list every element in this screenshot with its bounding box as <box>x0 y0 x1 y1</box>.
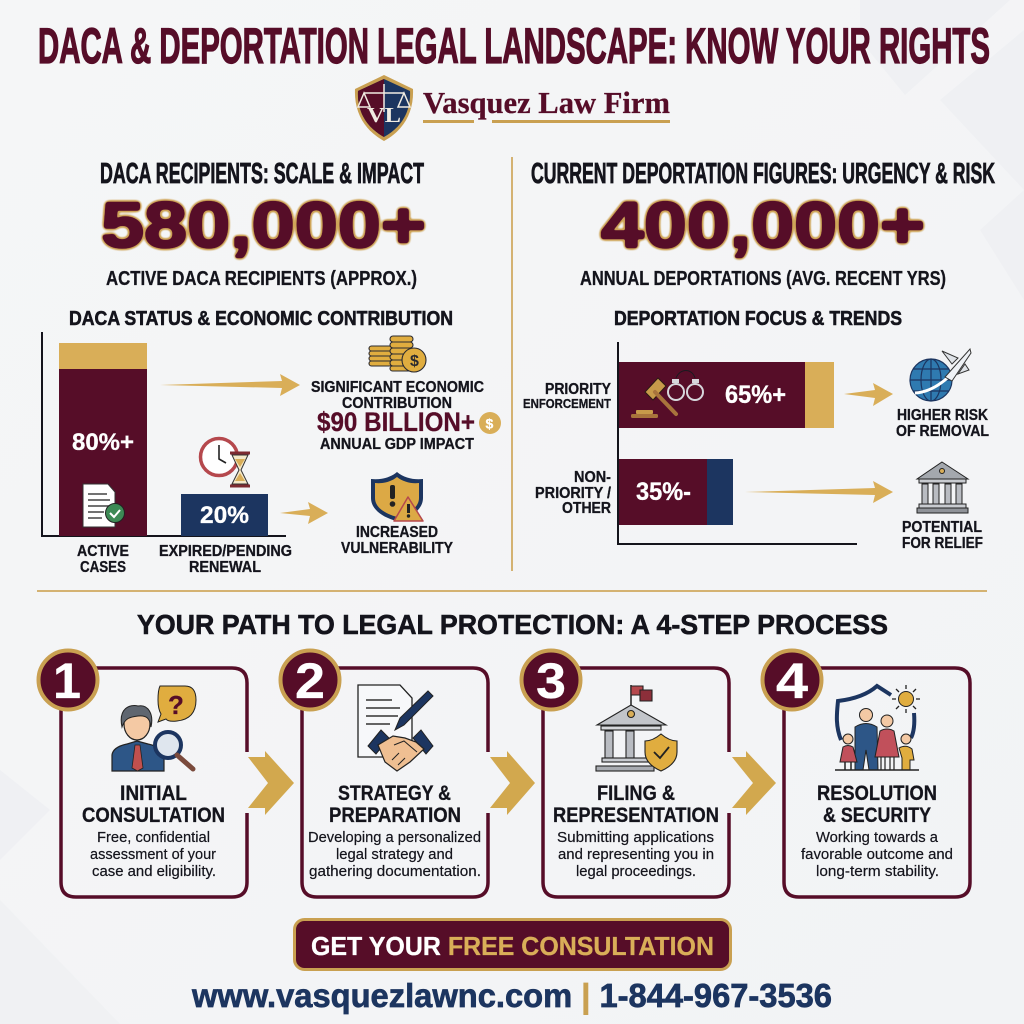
step description <box>557 829 714 880</box>
callout: higher risk of removal: OF REMOVAL <box>896 423 989 440</box>
step title: RESOLUTION <box>817 782 937 805</box>
panel: step 4 <box>762 650 970 897</box>
value 20%: 20% <box>200 502 249 529</box>
step title <box>329 782 461 827</box>
step description: long-term stability. <box>816 863 939 880</box>
label: expired/pending renewal <box>159 543 292 576</box>
icon: courthouse <box>917 462 968 513</box>
number badge 2 <box>280 650 340 710</box>
arrow: step 3 to 4 <box>732 751 776 815</box>
callout: economic contribution: SIGNIFICANT ECONOMIC <box>311 379 484 396</box>
big number: 400,000+ <box>601 189 925 261</box>
icon: handcuffs <box>668 370 703 400</box>
icon: courthouse with shield <box>596 685 677 771</box>
value 80%: 80%+ <box>72 429 134 456</box>
label: active cases: ACTIVE <box>77 543 129 560</box>
label: non-priority / other <box>535 469 612 517</box>
callout: economic contribution <box>311 379 484 453</box>
section divider horizontal <box>37 590 987 592</box>
step description: legal strategy and <box>336 846 453 863</box>
card outline <box>543 668 729 897</box>
coin symbol: $ <box>410 353 419 370</box>
label: priority enforcement: PRIORITY <box>545 381 612 398</box>
value 35%: 35%- <box>636 478 691 506</box>
card outline <box>302 668 488 897</box>
logo wordmark: Vasquez Law Firm <box>423 85 670 120</box>
label: priority enforcement: ENFORCEMENT <box>523 397 611 411</box>
callout: higher risk of removal: HIGHER RISK <box>897 407 989 424</box>
value 65%: 65%+ <box>725 381 786 409</box>
heading: DACA RECIPIENTS: SCALE & IMPACT <box>100 158 424 190</box>
bar chart: deportation focus <box>523 342 857 544</box>
icon: person with magnifier: ? <box>168 690 184 720</box>
step description <box>308 829 481 880</box>
step title <box>553 782 719 827</box>
step description: case and eligibility. <box>92 863 216 880</box>
arrow: step 2 to 3 <box>490 751 535 815</box>
heading: 4-step process: YOUR PATH TO LEGAL PROTECTION: A 4-STEP PROCESS <box>137 609 888 640</box>
step title: INITIAL <box>120 782 187 805</box>
arrow: to potential relief <box>745 481 893 503</box>
step title: PREPARATION <box>329 804 461 827</box>
label: priority enforcement <box>523 381 612 411</box>
big number: 580,000+ <box>101 189 426 261</box>
number badge 4 <box>762 650 822 710</box>
callout: economic contribution: ANNUAL GDP IMPACT <box>320 436 474 453</box>
card outline <box>61 668 247 897</box>
icon: shield crest <box>355 75 413 141</box>
number badge 4: 4 <box>776 653 808 709</box>
number badge 1: 1 <box>53 653 81 709</box>
step title: CONSULTATION <box>82 804 225 827</box>
step description: Submitting applications <box>557 829 714 846</box>
icon: shield crest: VL <box>367 103 401 127</box>
footer contact line: www.vasquezlawnc.com | 1-844-967-3536 <box>191 977 832 1014</box>
step description <box>801 829 953 880</box>
callout: potential for relief: POTENTIAL <box>902 519 982 536</box>
panel: step 1 <box>38 650 247 897</box>
label: non-priority / other: OTHER <box>562 500 611 517</box>
callout: economic contribution: $90 BILLION+ <box>317 407 475 437</box>
call-to-action button <box>294 920 730 970</box>
icon: coins <box>369 336 426 372</box>
arrow: to economic contribution <box>160 374 300 396</box>
number badge 1 <box>38 650 98 710</box>
icon: clock and hourglass <box>200 438 250 486</box>
step title: FILING & <box>597 782 675 805</box>
subheading: ACTIVE DACA RECIPIENTS (APPROX.) <box>106 268 417 290</box>
label: expired/pending renewal: EXPIRED/PENDING <box>159 543 292 560</box>
arrow: to increased vulnerability <box>280 502 328 524</box>
step title: & SECURITY <box>823 804 931 827</box>
number badge 2: 2 <box>295 653 325 709</box>
step description: gathering documentation. <box>309 863 481 880</box>
section divider vertical <box>511 157 513 571</box>
label: non-priority / other: PRIORITY / <box>535 485 612 502</box>
callout: increased vulnerability: VULNERABILITY <box>341 540 454 557</box>
callout: economic contribution: CONTRIBUTION <box>342 395 452 412</box>
callout: increased vulnerability <box>341 524 454 557</box>
label: active cases <box>77 543 129 576</box>
icon: person with magnifier <box>112 686 196 771</box>
step description: favorable outcome and <box>801 846 953 863</box>
callout: higher risk of removal <box>896 407 989 440</box>
icon: gavel <box>631 378 676 418</box>
step description: Free, confidential <box>97 829 210 846</box>
chart heading: DEPORTATION FOCUS & TRENDS <box>614 307 902 330</box>
step title: REPRESENTATION <box>553 804 719 827</box>
icon: dollar coin: $ <box>486 416 494 432</box>
step description: Working towards a <box>816 829 939 846</box>
icon: warning shield <box>371 472 423 521</box>
arrow: step 1 to 2 <box>248 751 294 815</box>
panel: step 2 <box>280 650 488 897</box>
card outline <box>784 668 970 897</box>
icon: globe and plane <box>910 349 971 401</box>
callout: potential for relief <box>902 519 983 552</box>
panel: step 3 <box>522 650 729 897</box>
icon: document with check <box>83 484 124 527</box>
number badge 3: 3 <box>536 653 566 709</box>
number badge 3 <box>522 650 580 710</box>
subheading: ANNUAL DEPORTATIONS (AVG. RECENT YRS) <box>580 268 946 290</box>
icon: dollar coin <box>479 412 501 434</box>
step title: STRATEGY & <box>338 782 451 805</box>
step description: assessment of your <box>90 846 216 863</box>
label: active cases: CASES <box>80 559 126 576</box>
callout: potential for relief: FOR RELIEF <box>902 535 983 552</box>
arrow: to higher risk <box>844 383 893 406</box>
icon: document, pen and handshake <box>358 685 433 771</box>
step description: legal proceedings. <box>576 863 696 880</box>
label: expired/pending renewal: RENEWAL <box>189 559 261 576</box>
call-to-action button: GET YOUR FREE CONSULTATION <box>311 931 714 961</box>
chart heading: DACA STATUS & ECONOMIC CONTRIBUTION <box>69 307 453 330</box>
panel: DACA recipients <box>42 158 501 576</box>
icon: protected family and sun <box>835 685 920 770</box>
step title <box>82 782 225 827</box>
step description: Developing a personalized <box>308 829 481 846</box>
callout: increased vulnerability: INCREASED <box>356 524 438 541</box>
logo: Vasquez Law Firm <box>355 75 670 141</box>
step description: and representing you in <box>558 846 714 863</box>
panel: current deportation figures <box>523 158 995 552</box>
step title <box>817 782 937 827</box>
label: non-priority / other: NON- <box>574 469 611 486</box>
bar chart: DACA status <box>42 332 292 576</box>
step description <box>90 829 216 880</box>
